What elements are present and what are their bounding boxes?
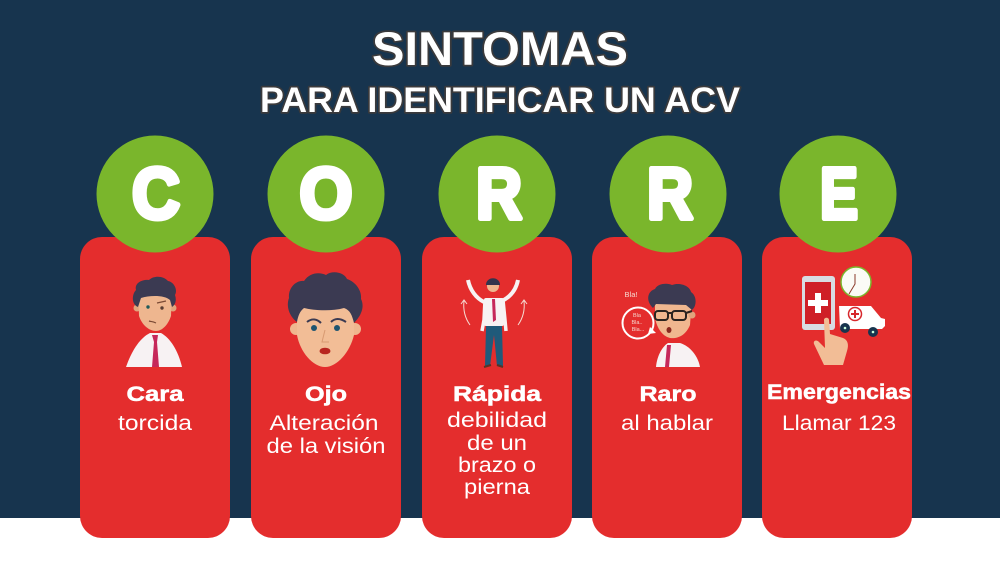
label: Emergencias: Llamar 123 [782, 412, 896, 435]
label: Raro: al hablar [621, 412, 713, 435]
label: Rápida: de un [467, 432, 527, 455]
label: Cara torcida: torcida [118, 412, 192, 435]
speech bubble: Bla... [632, 327, 645, 333]
label: Rápida: Rápida [453, 383, 541, 406]
clock [841, 267, 871, 297]
ambulance [839, 306, 885, 337]
panel: C - Cara torcida [80, 136, 230, 538]
label: Ojo: Alteración [270, 412, 378, 435]
label: Raro [621, 383, 713, 435]
badge: letter R: R [476, 154, 522, 234]
title: SINTOMAS [372, 22, 628, 75]
label: Emergencias [767, 381, 911, 435]
icon: phone, clock, ambulance and hand [802, 267, 885, 365]
label: Rápida: pierna [464, 476, 530, 499]
panel: R - Rápida [422, 136, 572, 538]
label: Rápida [447, 383, 547, 499]
speech bubble: Bla [633, 313, 642, 319]
title: PARA IDENTIFICAR UN ACV [260, 81, 741, 120]
label: Cara torcida [118, 383, 192, 435]
badge: letter O [268, 136, 384, 252]
label: Ojo: de la visión [266, 435, 386, 458]
badge: letter E [780, 136, 896, 252]
badge: letter R: R [647, 154, 693, 234]
badge: letter O: O [300, 154, 352, 234]
icon: man with speech bubble [622, 284, 700, 367]
panel: O - Ojo [251, 136, 401, 538]
panel: R - Raro [592, 136, 742, 538]
label: Emergencias: Emergencias [767, 381, 911, 404]
title [260, 22, 741, 120]
hand [814, 318, 848, 365]
icon: man raising arms with arrows [461, 278, 527, 367]
label: Cara torcida: Cara [126, 383, 184, 406]
arrows [461, 300, 527, 325]
speech bubble: Bla.. [631, 320, 643, 326]
badge: letter R [610, 136, 726, 252]
phone [802, 276, 835, 330]
label: Rápida: debilidad [447, 409, 547, 432]
label: Ojo: Ojo [305, 383, 347, 406]
speech bubble [622, 308, 656, 338]
panel: E - Emergencias [762, 136, 912, 538]
label: Ojo [266, 383, 386, 458]
badge: letter E: E [820, 154, 858, 234]
icon: man with drooping face [126, 277, 182, 367]
label: Raro: Raro [640, 383, 696, 406]
badge: letter R [438, 136, 556, 252]
exclamation: Bla! [625, 290, 637, 299]
badge: letter C [96, 136, 214, 252]
label: Rápida: brazo o [458, 454, 536, 477]
icon: worried face [288, 272, 363, 367]
badge: letter C: C [132, 154, 180, 234]
